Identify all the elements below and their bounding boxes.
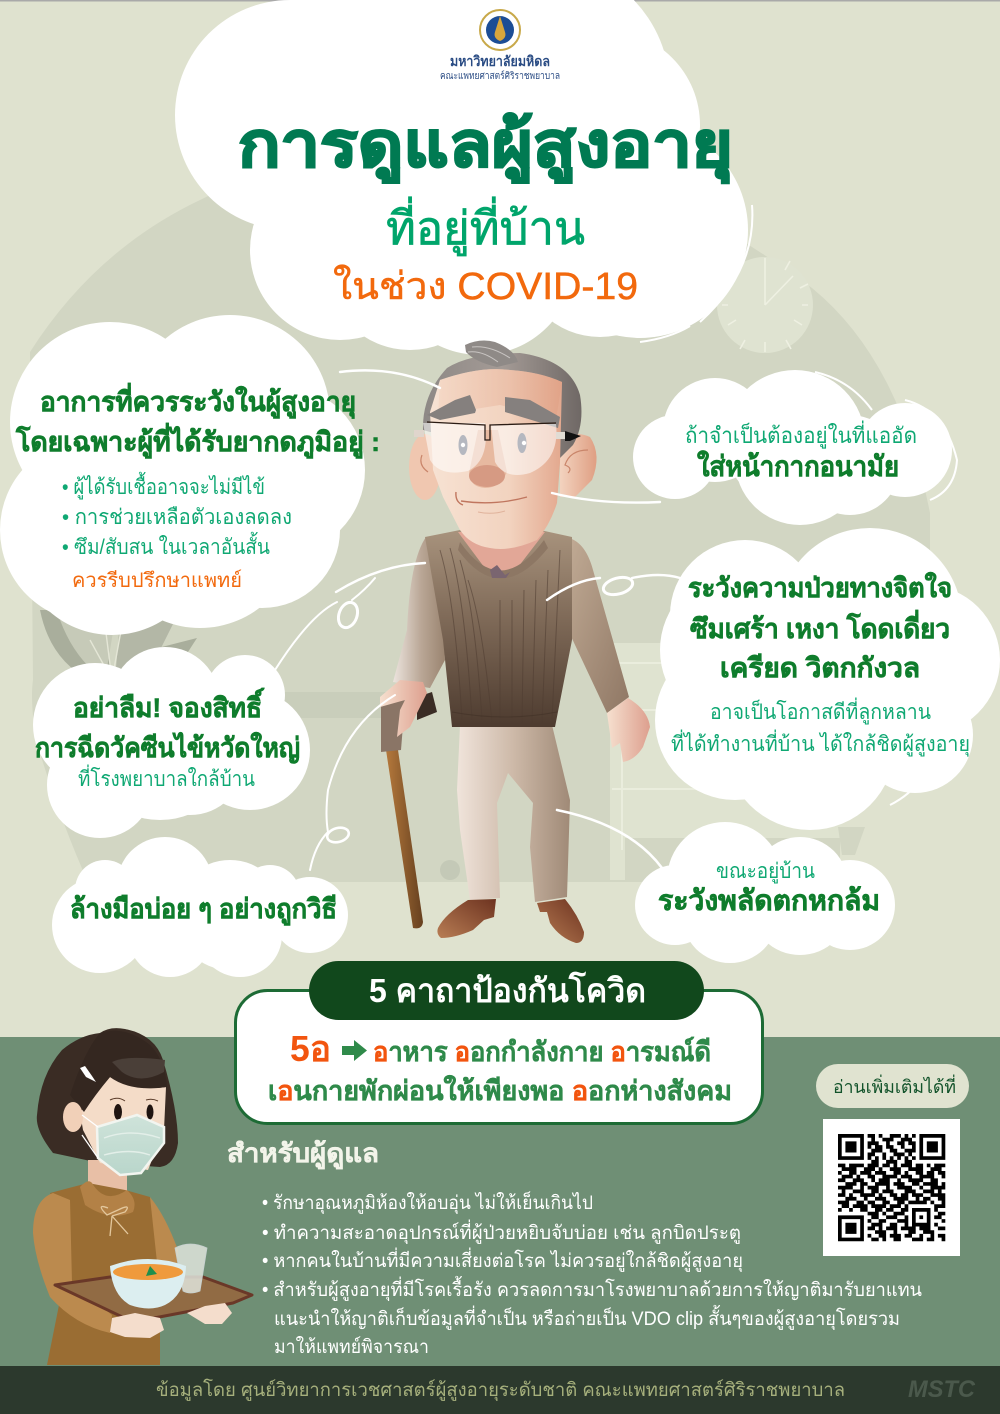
illustration: caregiver with tray (33, 1028, 252, 1365)
MSTC logo: MSTC (908, 1376, 976, 1403)
cloud: mental health (655, 528, 1000, 830)
university name: มหาวิทยาลัยมหิดล (450, 53, 550, 69)
text block: mental health: ระวังความป่วยทางจิตใจ (688, 572, 952, 603)
right hand (607, 698, 650, 762)
cloud: title (175, 0, 752, 355)
text block: mental health: อาจเป็นโอกาสดีที่ลูกหลาน (710, 697, 931, 725)
text block: mental health: ซึมเศร้า เหงา โดดเดี่ยว (690, 609, 950, 644)
subtitle covid: ในช่วง COVID-19 (333, 265, 638, 308)
header pill: 5 คาถาป้องกันโควิด (369, 971, 646, 1009)
eyes (114, 1104, 122, 1120)
sweater ribs (440, 548, 560, 724)
caregiver bullet list (262, 1190, 922, 1358)
face (80, 1077, 166, 1170)
text block: mask (685, 420, 917, 482)
caregiver bullet list: แนะนำให้ญาติเก็บข้อมูลที่จำเป็น หรือถ่ายเป็น VDO clip สั้นๆของผู้สูงอายุโดยรวม (274, 1305, 900, 1331)
text block: mental health (671, 572, 970, 757)
hair clip (80, 1066, 96, 1082)
dress (47, 1183, 160, 1365)
man walking with cane (380, 341, 650, 943)
cane shaft (386, 750, 423, 928)
collar (80, 1181, 135, 1216)
cloud: mask (633, 370, 957, 525)
right sleeve (565, 537, 629, 713)
glass (175, 1244, 207, 1293)
glasses (423, 423, 486, 473)
neck and collar (458, 532, 545, 575)
cloud: handwashing (52, 837, 348, 977)
mantra line one: อาหาร ออกกำลังกาย อารมณ์ดี (373, 1036, 711, 1067)
read more pill: อ่านเพิ่มเติมได้ที่ (833, 1074, 956, 1097)
caregiver bullet list: • หากคนในบ้านที่มีความเสี่ยงต่อโรค ไม่ควรอยู่ใกล้ชิดผู้สูงอายุ (262, 1247, 743, 1273)
footer bar (0, 1366, 1000, 1414)
tray (55, 1277, 252, 1322)
trousers (457, 725, 570, 902)
bowl (110, 1259, 186, 1308)
text block: falls (658, 860, 880, 916)
text block: warning symptoms (15, 382, 380, 592)
text block: warning symptoms: • การช่วยเหลือตัวเองลดลง (62, 506, 292, 529)
text block: mask: ถ้าจำเป็นต้องอยู่ในที่แออัด (685, 420, 917, 449)
text block: handwashing: ล้างมือบ่อย ๆ อย่างถูกวิธี (70, 894, 337, 926)
title: การดูแลผู้สูงอายุ (238, 111, 733, 183)
caregiver bullet list: มาให้แพทย์พิจารณา (274, 1336, 429, 1358)
text block: vaccine: การฉีดวัคซีนไข้หวัดใหญ่ (35, 732, 300, 764)
fringe (70, 1031, 167, 1112)
text block: mental health: เครียด วิตกกังวล (720, 653, 920, 683)
read more pill (816, 1064, 969, 1108)
cloud: vaccine (33, 647, 310, 838)
text block: mental health: ที่ได้ทำงานที่บ้าน ได้ใกล้ชิดผู้สูงอายุ (671, 729, 970, 757)
sweater (425, 530, 572, 727)
connector curls (275, 370, 680, 870)
QR code (823, 1119, 960, 1256)
mouth (456, 492, 527, 505)
cloud: falls (635, 822, 895, 963)
text block: warning symptoms: ควรรีบปรึกษาแพทย์ (72, 569, 242, 592)
caregiver heading: สำหรับผู้ดูแล (227, 1138, 379, 1170)
left shoe (437, 899, 496, 938)
wall clock (717, 257, 813, 353)
panel: five mantras (236, 961, 762, 1124)
hair tuft (465, 341, 518, 367)
bow (101, 1207, 128, 1236)
text block: warning symptoms: • ซึม/สับสน ในเวลาอันสั้น (62, 532, 270, 559)
right shoe (537, 899, 584, 943)
text block: warning symptoms: อาการที่ควรระวังในผู้สูงอายุ (40, 382, 356, 419)
five-o label: 5อ (290, 1028, 331, 1069)
caregiver bullet list: • รักษาอุณหภูมิห้องให้อบอุ่น ไม่ให้เย็นเกินไป (262, 1190, 593, 1215)
sleeve right (150, 1197, 178, 1300)
head (430, 369, 562, 549)
mantra line two: เอนกายพักผ่อนให้เพียงพอ ออกห่างสังคม (268, 1075, 732, 1106)
eyes (458, 435, 468, 455)
faculty name: คณะแพทยศาสตร์ศิริราชพยาบาล (440, 70, 560, 82)
text block: falls: ขณะอยู่บ้าน (716, 860, 815, 884)
eyebrows (427, 395, 476, 420)
footer credit: ข้อมูลโดย ศูนย์วิทยาการเวชศาสตร์ผู้สูงอายุระดับชาติ คณะแพทยศาสตร์ศิริราชพยาบาล (156, 1378, 845, 1402)
cane handle (417, 692, 437, 720)
text block: warning symptoms: โดยเฉพาะผู้ที่ได้รับยากดภูมิอยู่ : (15, 422, 380, 459)
nose (469, 430, 507, 488)
lower green band (0, 1037, 1000, 1367)
caregiver bullet list: • ทำความสะอาดอุปกรณ์ที่ผู้ป่วยหยิบจับบ่อย เช่น ลูกบิดประตู (262, 1219, 741, 1245)
header pill (309, 961, 704, 1020)
ear (63, 1102, 83, 1132)
left hand (380, 680, 427, 737)
text block: falls: ระวังพลัดตกหกล้ม (658, 885, 880, 916)
text block: vaccine: ที่โรงพยาบาลใกล้บ้าน (78, 764, 255, 791)
text block: vaccine (35, 688, 300, 791)
logo: Mahidol University seal (440, 10, 560, 82)
text block: warning symptoms: • ผู้ได้รับเชื้ออาจจะไม่มีไข้ (62, 472, 265, 500)
icon: arrow (342, 1040, 367, 1061)
sleeve left (33, 1193, 112, 1333)
hair (37, 1028, 178, 1167)
left sleeve (393, 537, 445, 688)
subtitle: ที่อยู่ที่บ้าน (386, 196, 585, 256)
text block: vaccine: อย่าลืม! จองสิทธิ์ (73, 688, 264, 723)
hands (110, 1313, 164, 1338)
caregiver bullet list: • สำหรับผู้สูงอายุที่มีโรคเรื้อรัง ควรลดการมาโรงพยาบาลด้วยการให้ญาติมารับยาแทน (262, 1276, 922, 1302)
text block: mask: ใส่หน้ากากอนามัย (697, 450, 899, 482)
ears (409, 434, 441, 500)
neck (88, 1160, 127, 1205)
cloud: warning symptoms (0, 315, 365, 635)
hair back (423, 353, 581, 462)
potted plant leaves (40, 610, 197, 690)
surgical mask (97, 1115, 164, 1175)
